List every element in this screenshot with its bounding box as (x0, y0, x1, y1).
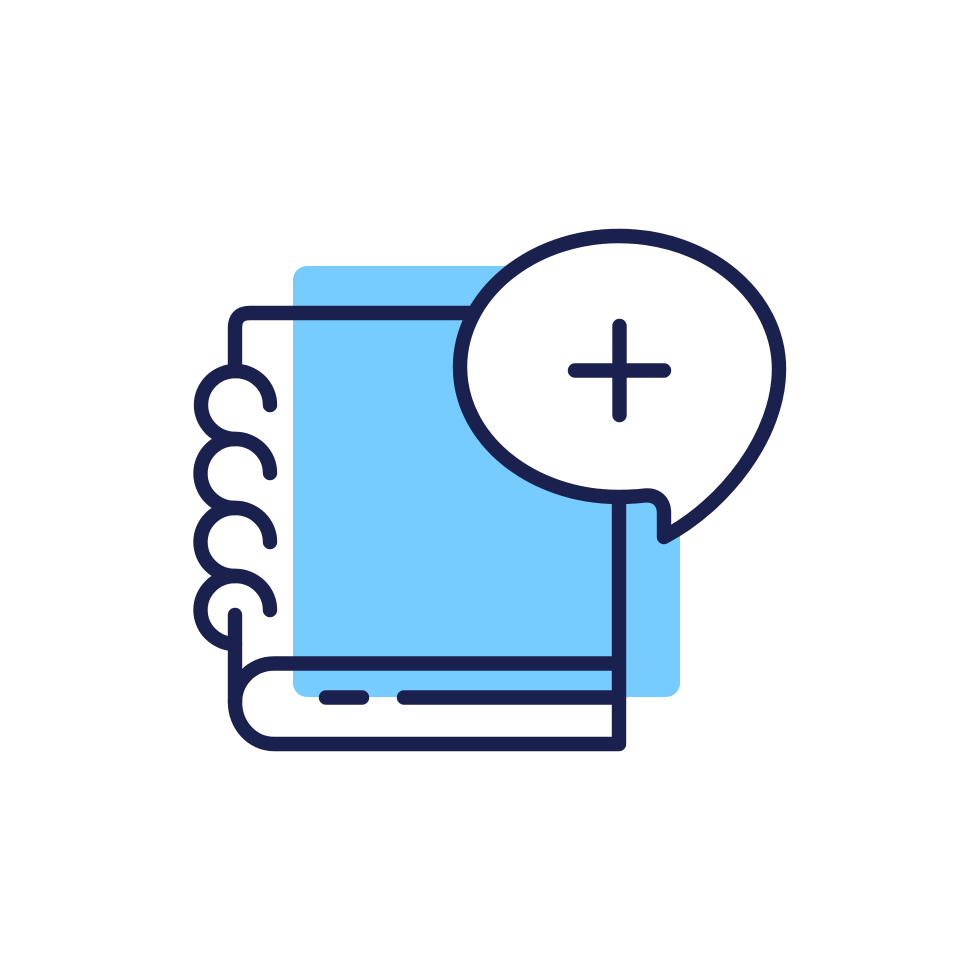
notebook outline (201, 313, 619, 744)
plus sign (575, 326, 664, 415)
top edge of cover (235, 313, 480, 371)
short page line (326, 690, 362, 705)
book body, page block and right edge (235, 480, 619, 744)
binding spine (228, 615, 242, 702)
spiral binding (201, 371, 270, 644)
long page line (404, 690, 619, 705)
blue background rectangle (293, 266, 680, 697)
bubble outline (460, 236, 779, 537)
speech bubble with plus (460, 236, 779, 537)
